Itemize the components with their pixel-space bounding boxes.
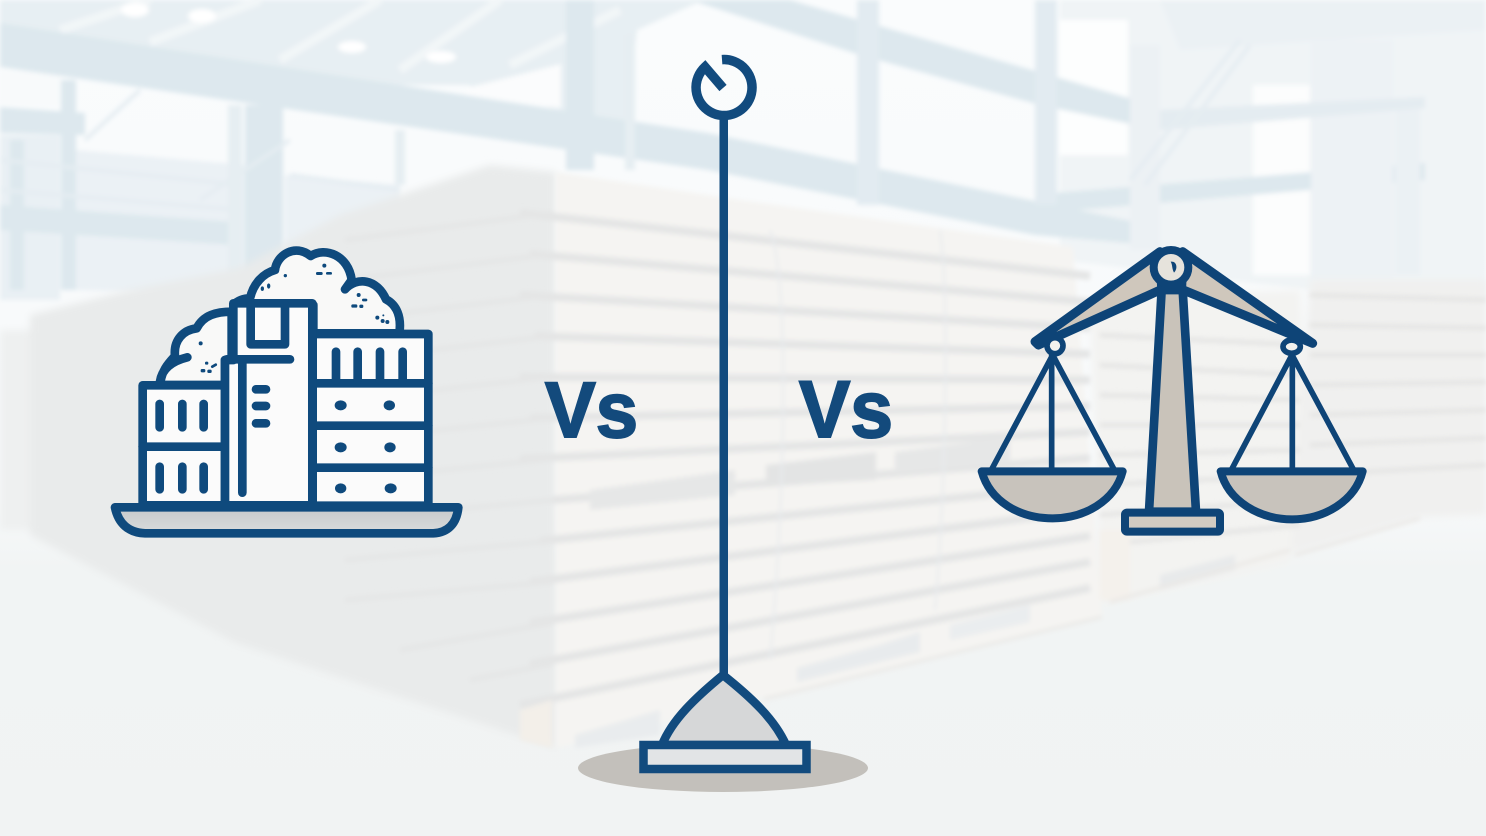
right ring and hangers — [1283, 340, 1300, 353]
text: left Vs: Vs — [545, 365, 638, 454]
left pan — [982, 471, 1123, 518]
left building — [143, 385, 225, 505]
base shadow — [578, 744, 868, 792]
tray — [115, 507, 458, 533]
column — [1149, 290, 1196, 512]
icon: balance scale — [982, 250, 1363, 532]
right pan — [1221, 471, 1363, 519]
dome base — [662, 675, 786, 745]
icon: center divider pole with base — [578, 60, 868, 792]
left beam — [1035, 252, 1162, 345]
pivot — [1154, 250, 1188, 285]
ring top with pointer — [696, 60, 752, 116]
icon: factory with smoke cloud on a tray — [115, 251, 458, 533]
base plate — [644, 745, 806, 769]
base block — [1125, 513, 1220, 532]
smoke specks — [199, 264, 389, 373]
text: right Vs: Vs — [799, 365, 893, 455]
left ring and hangers — [1047, 338, 1063, 354]
pole line — [720, 115, 728, 675]
center tower — [225, 303, 312, 505]
right building — [313, 334, 428, 506]
smoke cloud lower — [160, 312, 232, 385]
right beam — [1182, 252, 1313, 343]
smoke cloud upper — [233, 251, 400, 333]
